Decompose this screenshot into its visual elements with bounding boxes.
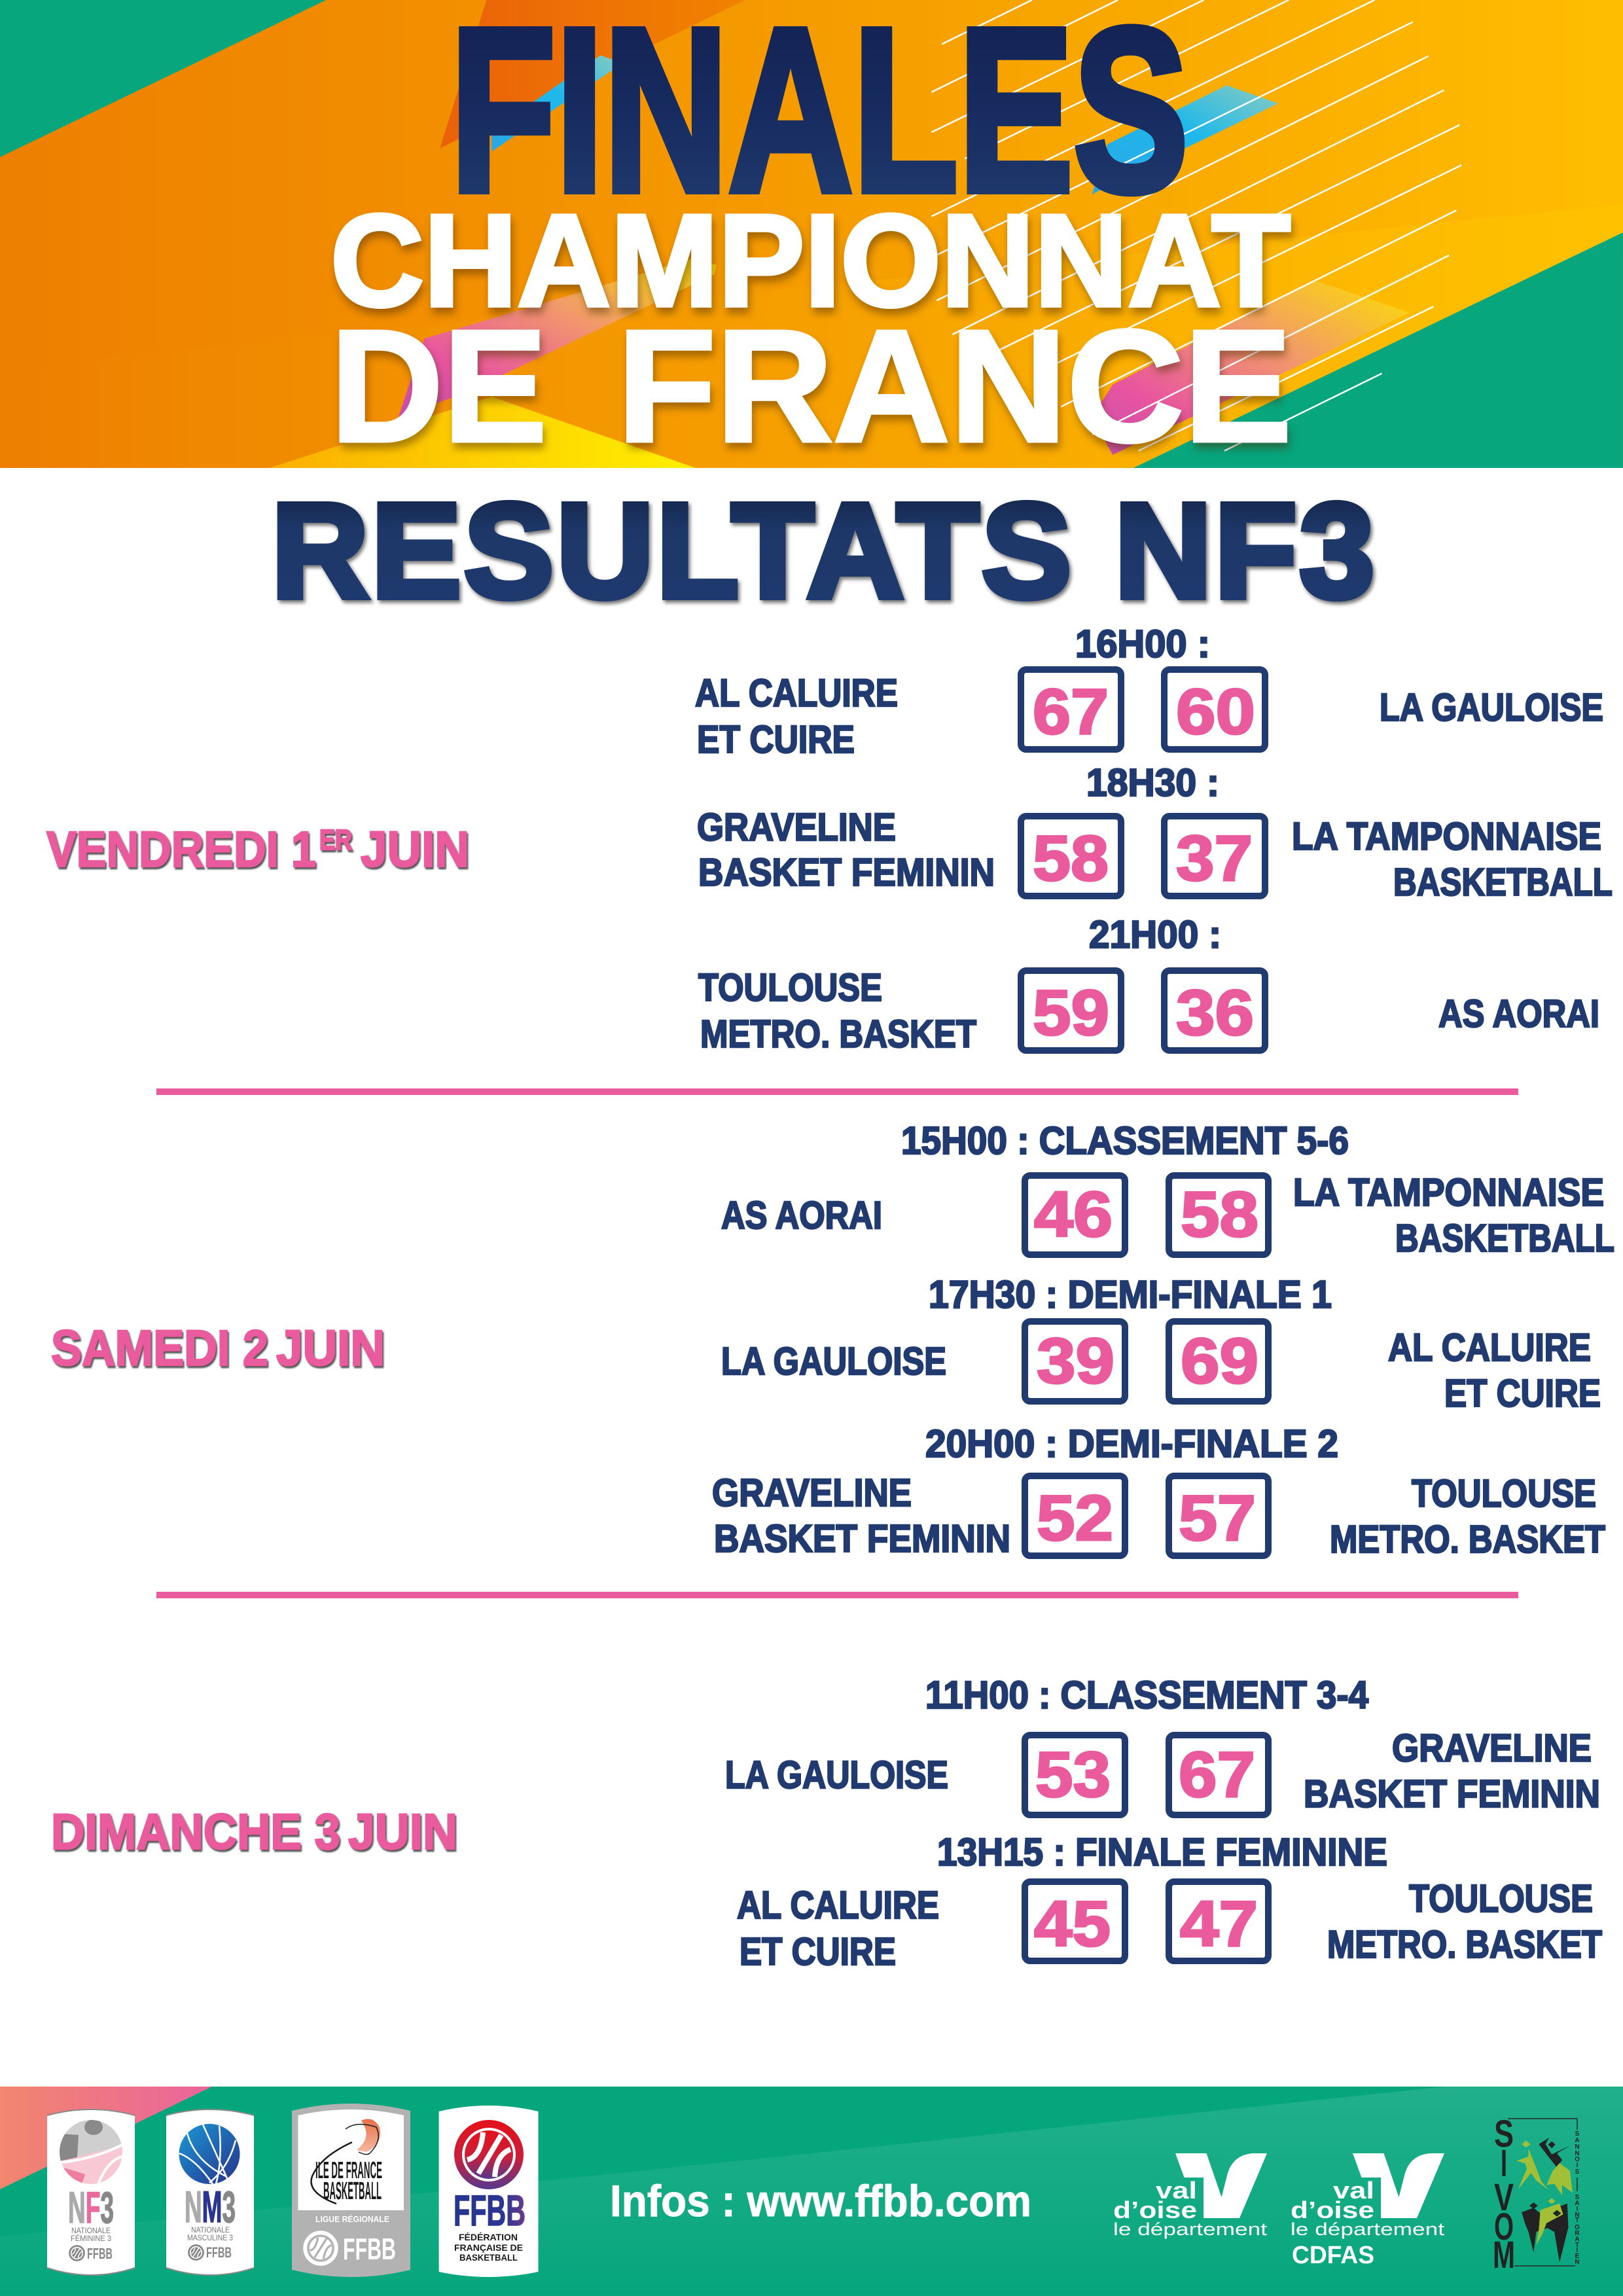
home team	[695, 672, 898, 761]
header background	[0, 0, 1623, 468]
score box home	[1025, 1735, 1125, 1815]
title: CHAMPIONNAT: CHAMPIONNAT	[330, 188, 1291, 334]
day label: Samedi 2 juin: JUIN	[276, 1320, 385, 1376]
score box away	[1164, 971, 1265, 1050]
time: 15H00 : CLASSEMENT 5-6	[901, 1119, 1349, 1162]
score box away	[1169, 1321, 1268, 1401]
FFBB logotype: FFBB	[454, 2186, 526, 2234]
SIVOM letters: I	[1501, 2142, 1507, 2185]
SIVOM side text: SANNOIS	[1575, 2130, 1580, 2176]
score box home	[1021, 816, 1121, 896]
time: 16H00 :	[1075, 622, 1210, 666]
NF3 caption: FÉMININE 3	[71, 2233, 111, 2243]
home team	[698, 966, 976, 1056]
score away: 58	[1181, 1178, 1258, 1250]
home team: AS AORAI	[721, 1194, 882, 1237]
away team: BASKET FEMININ	[1304, 1772, 1600, 1816]
icon: FFBB mark	[305, 2233, 336, 2264]
home team: GRAVELINE	[712, 1471, 912, 1515]
away team: AS AORAI	[1438, 992, 1599, 1035]
score home: 58	[1033, 822, 1109, 894]
NM3 logotype: NM3	[185, 2182, 236, 2232]
NM3 caption: NATIONALE	[191, 2225, 230, 2234]
score home: 39	[1037, 1325, 1115, 1397]
badge: NM3	[166, 2109, 254, 2275]
logo: Val d'Oise CDFAS	[1291, 2153, 1445, 2269]
score home: 52	[1037, 1482, 1113, 1554]
time: 21H00 :	[1089, 913, 1221, 956]
day label: Vendredi 1er juin: ER	[319, 824, 352, 856]
icon: FFBB mark	[188, 2245, 203, 2259]
SIVOM letters: S	[1494, 2113, 1514, 2155]
footer	[0, 2087, 1623, 2296]
footer light band	[0, 2087, 1623, 2296]
home team	[697, 806, 995, 894]
logo: Val d'Oise CDFAS: le département	[1291, 2219, 1445, 2239]
home team: BASKET FEMININ	[714, 1517, 1010, 1560]
time: 13H15 : FINALE FEMININE	[937, 1831, 1387, 1874]
score box away	[1169, 1882, 1268, 1961]
home team	[712, 1471, 1010, 1560]
score box home	[1021, 670, 1121, 749]
header banner	[0, 0, 1623, 475]
federation name	[454, 2232, 523, 2263]
day label: Dimanche 3 juin: DIMANCHE 3	[51, 1804, 340, 1860]
NF3 caption	[71, 2226, 111, 2243]
home team: BASKET FEMININ	[698, 851, 995, 894]
league name	[315, 2157, 382, 2205]
score away: 60	[1176, 675, 1255, 747]
score home: 46	[1034, 1178, 1113, 1250]
away team: GRAVELINE	[1392, 1727, 1592, 1770]
score box away	[1169, 1735, 1268, 1815]
website: Infos : www.ffbb.com	[610, 2176, 1031, 2226]
score away: 47	[1180, 1888, 1258, 1960]
badge: NF3	[47, 2109, 135, 2275]
score home: 67	[1033, 675, 1109, 747]
score box home	[1025, 1476, 1125, 1556]
score home: 53	[1035, 1738, 1111, 1810]
badge: Ile de France	[292, 2104, 410, 2277]
score box away	[1164, 816, 1265, 896]
away team	[1304, 1727, 1600, 1816]
logo: Val d'Oise: le département	[1113, 2219, 1268, 2239]
match: 13H15 finale feminine	[737, 1831, 1602, 1973]
away team: TOULOUSE	[1412, 1472, 1596, 1515]
SIVOM letters	[1493, 2113, 1515, 2276]
SIVOM letters: V	[1494, 2176, 1514, 2219]
home team: ET CUIRE	[697, 718, 855, 761]
match: 17H30 demi-finale 1	[721, 1273, 1601, 1415]
title: DE FRANCE	[330, 296, 1292, 475]
away team	[1330, 1472, 1605, 1561]
home team: AL CALUIRE	[737, 1884, 939, 1927]
heading: RESULTATS NF3: RESULTATS NF3	[272, 476, 1374, 626]
SIVOM side text: SAINTGRATIEN	[1575, 2194, 1580, 2266]
score box home	[1021, 971, 1121, 1050]
icon: SIVOM figures	[1516, 2138, 1573, 2263]
day label: Dimanche 3 juin: JUIN	[348, 1804, 457, 1860]
footer background	[0, 2087, 1623, 2296]
badge: Ile de France: ILE DE FRANCE	[315, 2157, 382, 2183]
title: DE FRANCE: DE	[330, 296, 547, 475]
score away: 37	[1176, 822, 1253, 894]
logo: Val d'Oise	[1113, 2153, 1268, 2239]
icon: FFBB ball	[454, 2120, 524, 2189]
badge: Ile de France: BASKETBALL	[323, 2178, 382, 2205]
logo: Val d'Oise CDFAS: CDFAS	[1292, 2242, 1374, 2269]
away team	[1293, 1171, 1614, 1260]
federation name: FRANÇAISE DE	[454, 2242, 523, 2253]
NF3 logotype: NF3	[68, 2183, 114, 2233]
score box home	[1025, 1321, 1125, 1401]
SIVOM letters: O	[1494, 2206, 1514, 2248]
FFBB mark text: FFBB	[343, 2232, 396, 2266]
away team: AL CALUIRE	[1388, 1326, 1591, 1369]
score box away	[1169, 1175, 1268, 1255]
icon: swoosh	[312, 2119, 380, 2204]
match: 21H00	[698, 913, 1599, 1056]
logo: Val d'Oise: d’oise	[1113, 2197, 1197, 2223]
federation name: FÉDÉRATION	[459, 2232, 518, 2242]
match: 11H00 classement 3-4	[725, 1674, 1600, 1816]
NM3 caption	[187, 2225, 233, 2242]
score box away	[1169, 1476, 1268, 1556]
logo: Val d'Oise CDFAS: d’oise	[1291, 2197, 1374, 2223]
time: 17H30 : DEMI-FINALE 1	[929, 1273, 1332, 1316]
home team: LA GAULOISE	[725, 1753, 948, 1797]
score away: 36	[1176, 977, 1254, 1049]
away team	[1327, 1877, 1602, 1966]
score away: 67	[1179, 1738, 1255, 1810]
footer pink corner	[0, 2087, 212, 2189]
day label: Vendredi 1er juin: JUIN	[361, 821, 469, 878]
match: 18H30	[697, 761, 1613, 904]
divider 1	[156, 1088, 1518, 1095]
match: 16H00	[695, 622, 1603, 761]
match: 15H00 classement 5-6	[721, 1119, 1614, 1260]
score home: 45	[1034, 1888, 1111, 1960]
caption: LIGUE RÉGIONALE	[315, 2214, 389, 2224]
icon: FFBB mark	[69, 2246, 84, 2261]
icon: NF3 ball	[60, 2119, 122, 2185]
federation name: BASKETBALL	[459, 2252, 518, 2263]
NM3 caption: MASCULINE 3	[187, 2233, 233, 2242]
away team: TOULOUSE	[1409, 1877, 1593, 1920]
day label: Vendredi 1er juin: VENDREDI 1	[46, 821, 316, 878]
SIVOM frame	[1508, 2119, 1577, 2266]
FFBB mark text: FFBB	[206, 2244, 232, 2261]
FFBB mark text: FFBB	[87, 2245, 113, 2262]
home team: LA GAULOISE	[721, 1340, 946, 1383]
away team: ET CUIRE	[1444, 1372, 1601, 1415]
score box home	[1025, 1175, 1125, 1255]
badge: FFBB	[439, 2106, 538, 2277]
diagonal white lines	[927, 0, 1461, 451]
logo: Val d'Oise: val	[1156, 2177, 1197, 2204]
home team: GRAVELINE	[697, 806, 896, 849]
home team: METRO. BASKET	[700, 1013, 976, 1056]
day label: Samedi 2 juin: SAMEDI 2	[51, 1320, 268, 1376]
match: 20H00 demi-finale 2	[712, 1422, 1605, 1561]
title: DE FRANCE: FRANCE	[617, 296, 1292, 475]
home team	[737, 1884, 939, 1973]
away team	[1292, 815, 1613, 904]
score home: 59	[1033, 977, 1109, 1049]
SIVOM side text	[1575, 2130, 1580, 2266]
home team: ET CUIRE	[740, 1930, 896, 1973]
time: 18H30 :	[1086, 761, 1219, 804]
logo: SIVOM	[1493, 2113, 1580, 2276]
SIVOM letters: M	[1493, 2234, 1515, 2276]
score box home	[1025, 1882, 1125, 1961]
time: 20H00 : DEMI-FINALE 2	[925, 1422, 1338, 1465]
score away: 57	[1179, 1482, 1256, 1554]
divider 2	[156, 1592, 1518, 1598]
score box away	[1164, 670, 1265, 749]
score away: 69	[1181, 1325, 1258, 1397]
home team: AL CALUIRE	[695, 672, 898, 715]
time: 11H00 : CLASSEMENT 3-4	[925, 1674, 1368, 1717]
icon: NM3 ball	[179, 2124, 240, 2184]
logo: Val d'Oise CDFAS: val	[1333, 2177, 1374, 2204]
away team	[1388, 1326, 1601, 1415]
home team: TOULOUSE	[698, 966, 882, 1009]
NF3 caption: NATIONALE	[71, 2226, 111, 2235]
geometric shapes	[0, 0, 1623, 468]
